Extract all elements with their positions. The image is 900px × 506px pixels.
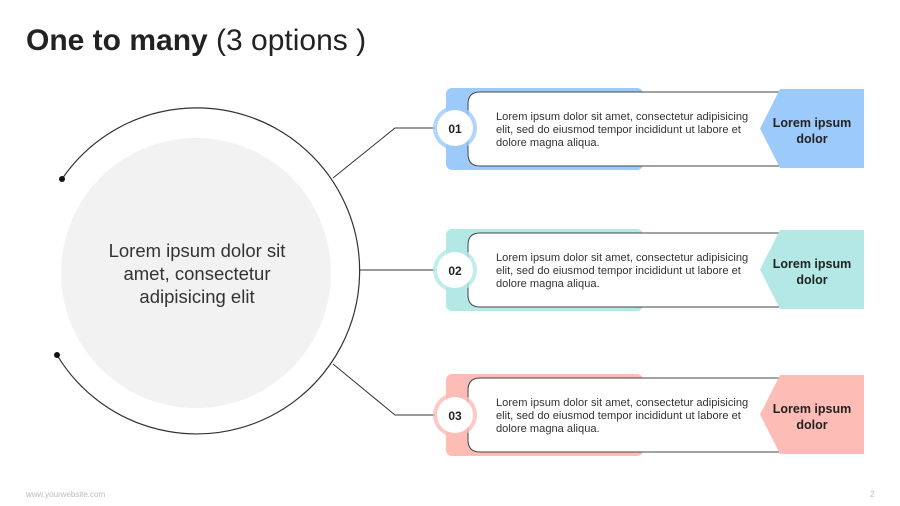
item 03: Lorem ipsum (773, 402, 851, 416)
item 01 (433, 88, 864, 170)
footer website: www.yourwebsite.com (25, 490, 105, 499)
item 03: dolor (796, 418, 828, 432)
item 02 (433, 229, 864, 311)
item 01: 01 (448, 122, 462, 136)
item 03 (433, 374, 864, 456)
item 02: 02 (448, 264, 462, 278)
center text: adipisicing elit (139, 286, 255, 307)
item 01: Lorem ipsum dolor sit amet, consectetur adipisicing (496, 111, 748, 123)
item 02: dolore magna aliqua. (496, 278, 600, 290)
item 01: elit, sed do eiusmod tempor incididunt ut labore et (496, 124, 741, 136)
item 01: Lorem ipsum (773, 116, 851, 130)
center text: amet, consectetur (123, 263, 271, 284)
center text: Lorem ipsum dolor sit (109, 240, 285, 261)
item 02: Lorem ipsum dolor sit amet, consectetur adipisicing (496, 252, 748, 264)
item 03: elit, sed do eiusmod tempor incididunt ut labore et (496, 410, 741, 422)
item 01: dolor (796, 132, 828, 146)
item 03: dolore magna aliqua. (496, 423, 600, 435)
item 03: Lorem ipsum dolor sit amet, consectetur adipisicing (496, 397, 748, 409)
title: One to many (3 options ) (26, 24, 366, 57)
page number: 2 (870, 490, 875, 499)
item 03: 03 (448, 409, 462, 423)
item 02: dolor (796, 273, 828, 287)
item 02: Lorem ipsum (773, 257, 851, 271)
connector lines (333, 128, 435, 415)
central circle diagram (54, 108, 360, 434)
item 02: elit, sed do eiusmod tempor incididunt ut labore et (496, 265, 741, 277)
item 01: dolore magna aliqua. (496, 137, 600, 149)
